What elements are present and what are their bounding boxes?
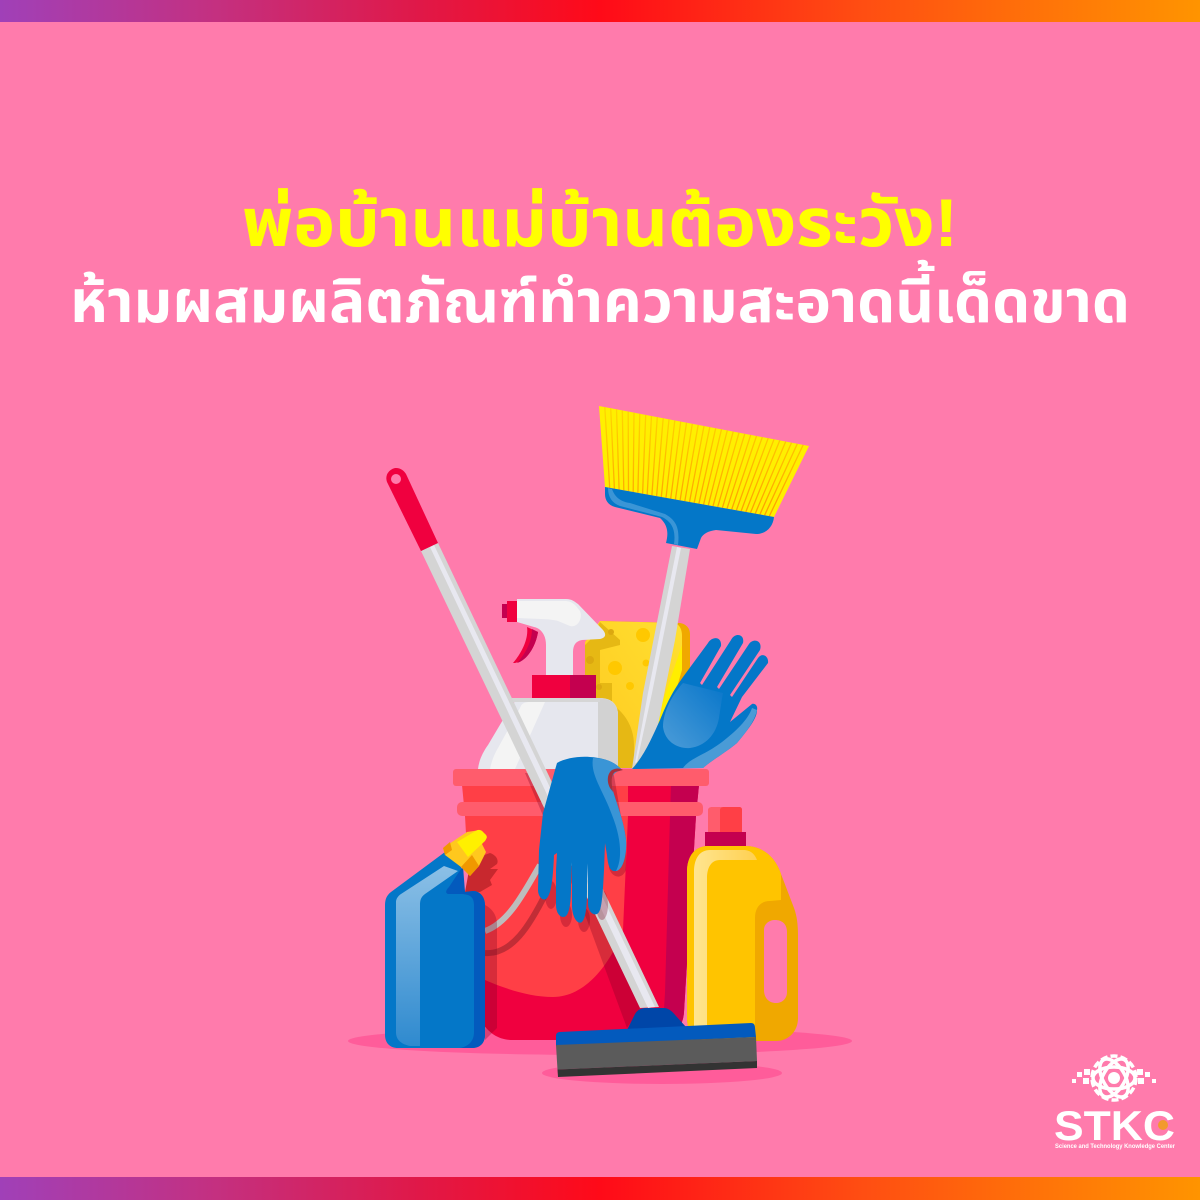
blue bottle	[385, 830, 498, 1048]
broom	[599, 406, 809, 769]
hanging glove	[538, 757, 626, 932]
illustration: cleaning supplies	[348, 406, 852, 1084]
logo: STKC	[1054, 1054, 1176, 1150]
logo atom nucleus	[1108, 1072, 1120, 1084]
right glove	[632, 635, 768, 769]
squeegee	[556, 1008, 757, 1077]
yellow bottle	[687, 807, 798, 1041]
subtitle: white headline: ห้ามผสมผลิตภัณฑ์ทำความสะอาดนี้เด็ดขาด	[70, 259, 1130, 335]
logo side squares	[1072, 1069, 1156, 1084]
floor shadows	[348, 1027, 852, 1084]
sponge	[585, 621, 690, 768]
mop	[386, 468, 659, 1028]
logo atom icon	[1092, 1054, 1136, 1102]
logo tagline: Science and Technology Knowledge Center	[1055, 1144, 1176, 1150]
logo orange dot	[1158, 1120, 1168, 1130]
top gradient bar	[0, 0, 1200, 22]
logo wordmark: STKC	[1054, 1102, 1175, 1149]
title: yellow headline: พ่อบ้านแม่บ้านต้องระวัง!	[242, 185, 958, 261]
spray bottle	[478, 599, 618, 769]
bottom gradient bar	[0, 1177, 1200, 1200]
bucket	[453, 769, 709, 1040]
